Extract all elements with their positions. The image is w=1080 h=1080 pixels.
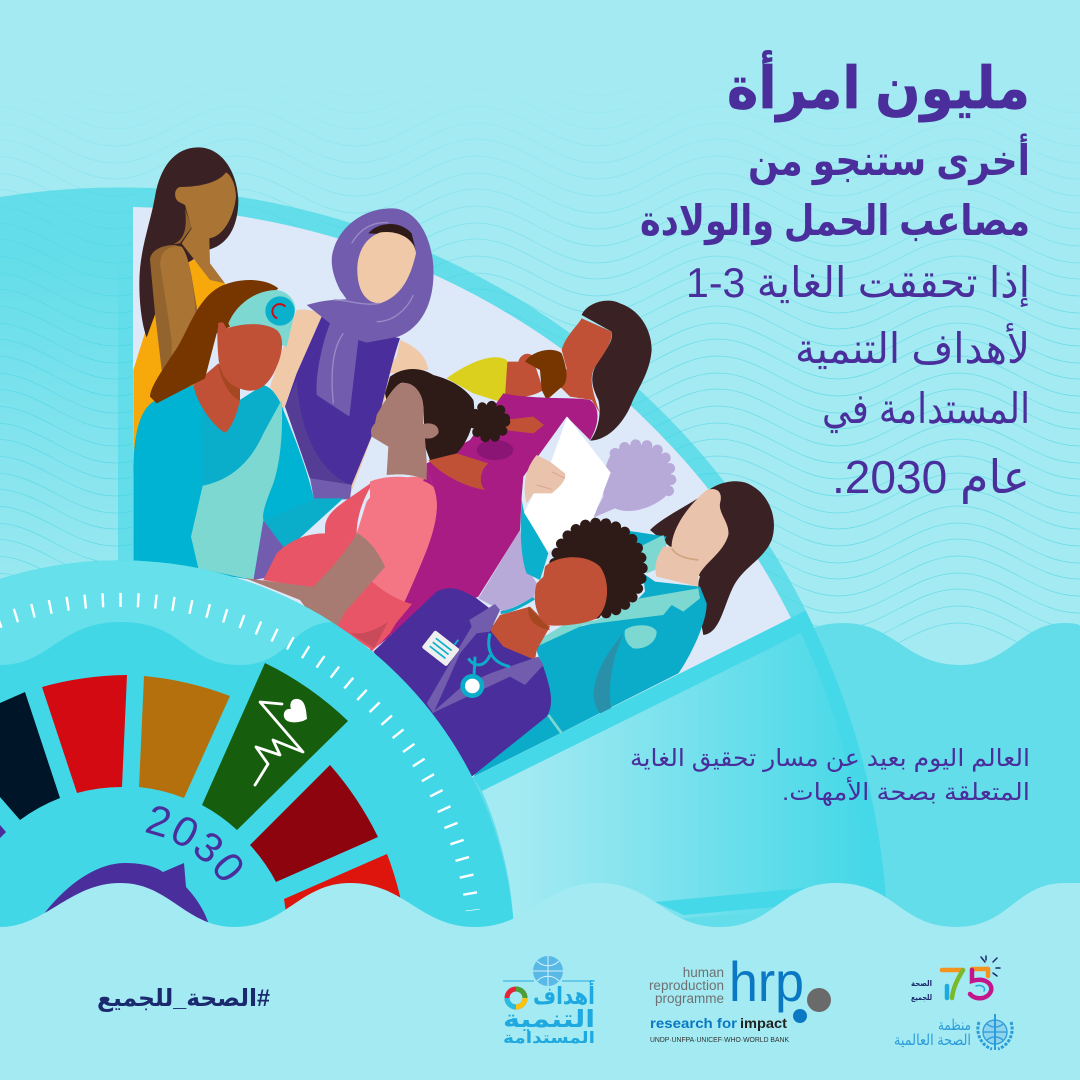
paper sheet held by a hand [521,417,611,580]
heading line 4: إذا تحققت الغاية 3-1 [686,259,1030,308]
woman in magenta holding a baby [370,301,652,652]
sdg segment ochre [139,676,230,798]
logo: sustainable development goals: التنمية [503,1006,595,1033]
small purple corner mark [0,825,6,838]
doctor with afro hair and purple coat [373,523,642,777]
logo: HRP research for impact: UNDP·UNFPA·UNICEF·WHO·WORLD BANK [650,1035,789,1044]
heading line 5: لأهداف التنمية [795,322,1030,372]
curved year label: 2030 [146,806,242,880]
logo: sustainable development goals [503,956,595,1047]
woman in purple hijab [270,208,433,499]
large fan disc behind the illustration [0,188,885,1000]
logo: HRP research for impact: programme [655,991,724,1006]
dial tick marks [0,600,473,910]
illustration: group of women, left side [133,147,437,590]
logo: sustainable development goals: المستدامة [503,1030,595,1047]
woman in yellow dress [133,147,238,473]
heading line 1: مليون امرأة [727,50,1030,123]
supporting text [630,745,1030,806]
logo: WHO 75 years: الصحة العالمية [894,1032,971,1049]
supporting text: العالم اليوم بعيد عن مسار تحقيق الغاية [630,745,1030,772]
sdg segment red [42,675,127,793]
supporting text: المتعلقة بصحة الأمهات. [782,777,1030,806]
bottom light wave [0,883,1080,1080]
2030 SDG gauge dial [0,560,514,927]
pregnant woman's head with curly hair [370,369,505,653]
illustration: group of women, right side [370,301,774,777]
sdg segment green: good health [202,663,348,830]
lighter wave at top of dial [0,560,332,665]
icon: UN emblem [533,956,563,986]
logo: HRP research for impact [649,950,831,1044]
curved year label [146,806,242,880]
woman with headscarf and crescent badge [133,280,343,580]
right teal wave panel [723,623,1080,1080]
logo: HRP research for impact: reproduction [649,978,724,993]
icon: heartbeat and heart [255,699,307,785]
logo: HRP research for impact: impact [740,1015,787,1031]
fan window background [133,207,791,777]
logo: WHO 75 years: منظمة [938,1017,971,1034]
logo: HRP research for impact: hrp [729,950,804,1013]
heading line 6: المستدامة في [822,385,1030,434]
logo: WHO 75 years [894,956,1012,1050]
logo: WHO 75 years: للجميع [911,993,932,1002]
main heading [640,50,1030,504]
logo: HRP research for impact: research for [650,1015,738,1031]
purple dial pointer [43,863,209,930]
icon: WHO emblem [978,1014,1012,1050]
icon: number 75 [942,956,1000,998]
sdg segment dark red [250,765,378,882]
icon: SDG colour wheel [507,989,525,1007]
logo: HRP research for impact: human [683,965,724,980]
pregnant woman in pink top, body [263,477,437,590]
pregnant woman's arm and lower blouse [245,533,412,650]
heading line 2: أخرى ستنجو من [748,133,1030,186]
logo: sustainable development goals: أهداف [533,980,595,1010]
heading line 7: عام 2030. [832,451,1030,504]
frame band and lower gradient panel [473,615,877,930]
sdg segment bright red [284,854,410,940]
lavender background silhouette [478,445,671,612]
logo: WHO 75 years: الصحة [911,979,932,988]
doctor with stethoscope [473,481,774,777]
hashtag: #الصحة_للجميع [97,985,270,1012]
sdg segment navy [0,692,60,820]
